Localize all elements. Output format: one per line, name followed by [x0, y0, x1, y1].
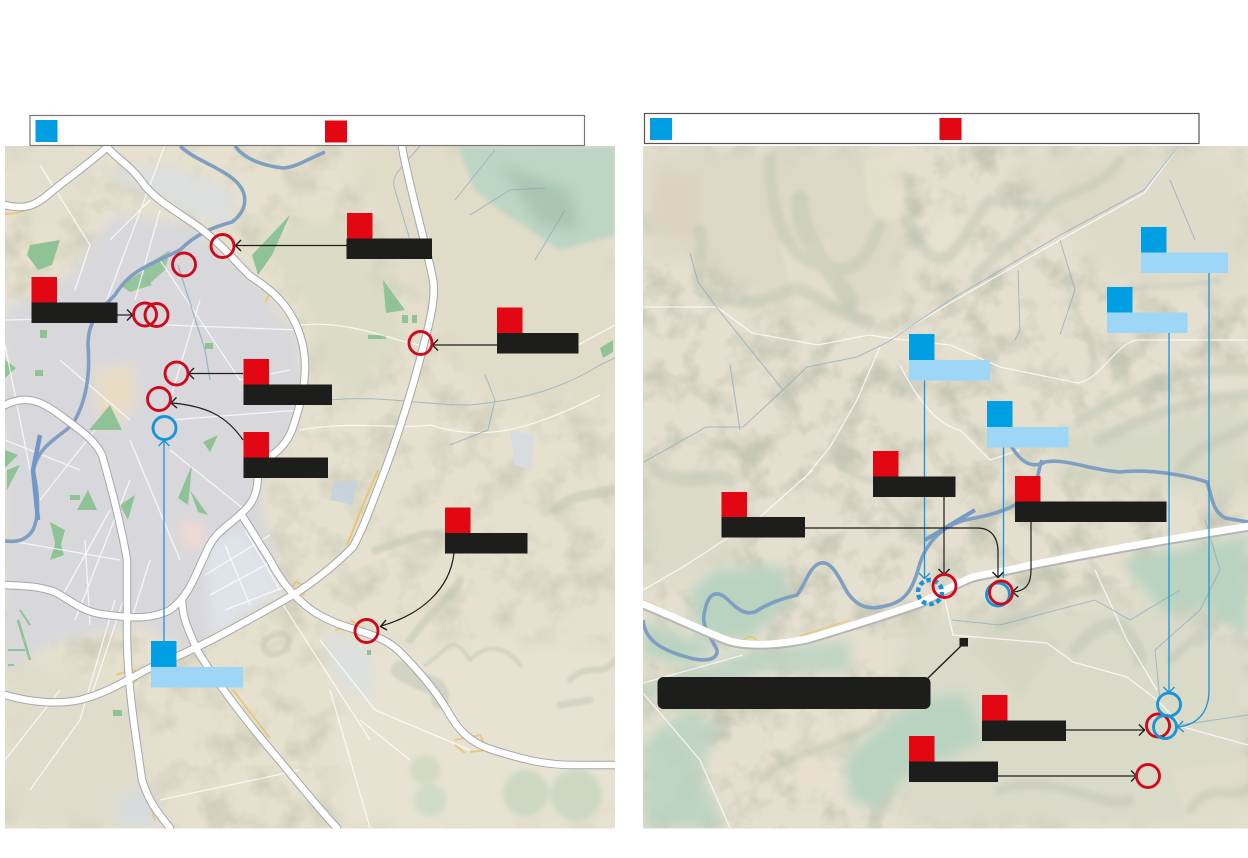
- label: red I: [909, 736, 998, 782]
- label: centre red: [244, 359, 332, 405]
- label: north-east red: [346, 213, 432, 259]
- label: south-east red: [445, 508, 528, 554]
- markers and callouts: left map: [32, 213, 578, 688]
- legend: right: [644, 114, 1199, 144]
- ramps: [5, 160, 487, 820]
- city area: [5, 215, 300, 670]
- arrow: blue line to blue circle: [158, 440, 170, 641]
- markers and callouts: right map: [658, 227, 1228, 788]
- river: [5, 146, 245, 541]
- label: south-centre red: [244, 432, 328, 478]
- black arrow G: [805, 528, 1004, 578]
- arrow: label to ring-road site: [235, 240, 347, 251]
- marker circles: [918, 574, 1180, 788]
- gullies: [655, 160, 1248, 810]
- arrow: label to centre site: [188, 368, 243, 379]
- label: south blue: [151, 641, 243, 688]
- blue line A with curved end: [1178, 273, 1209, 732]
- legend red swatch: [325, 120, 347, 142]
- black arrow I: [998, 770, 1136, 782]
- label: red G: [722, 492, 805, 538]
- legend: left: [30, 116, 584, 146]
- label: blue A: [1141, 227, 1228, 273]
- legend red swatch: [940, 118, 962, 140]
- blue line B: [1164, 333, 1174, 692]
- street grid: [5, 145, 615, 828]
- arrow: label to twin circles: [118, 310, 132, 320]
- label: blue D: [987, 401, 1068, 448]
- lane lines: [643, 147, 1248, 828]
- label: red F: [1015, 476, 1166, 522]
- forests: [640, 535, 1248, 828]
- label: west red: [32, 277, 118, 323]
- label: east red: [497, 308, 578, 354]
- arrow: curved to south-east site: [380, 553, 454, 630]
- blue line D: [1002, 447, 1004, 578]
- blue line C: [919, 380, 930, 578]
- label: blue B: [1107, 287, 1188, 333]
- parks: [5, 215, 613, 716]
- panel: left map: [5, 145, 615, 829]
- fields: [764, 169, 944, 772]
- panel: right map: [640, 146, 1248, 829]
- marker circles: [134, 234, 432, 642]
- label: red H: [982, 695, 1066, 741]
- arrow: curved to south-centre site: [171, 398, 243, 440]
- legend blue swatch: [36, 120, 58, 142]
- label: blue C: [909, 334, 990, 380]
- callout: rounded black note with leader: [658, 638, 968, 709]
- river: [643, 460, 1042, 660]
- black arrow E: [938, 497, 950, 574]
- black arrow H: [1066, 724, 1144, 736]
- forest: [458, 146, 615, 250]
- ramps: [643, 600, 850, 650]
- black arrow F: [1012, 522, 1031, 597]
- roads: [5, 147, 615, 828]
- motorway: [643, 527, 1248, 645]
- label: red E: [873, 451, 956, 497]
- arrow: label to east site: [432, 340, 497, 350]
- legend blue swatch: [650, 118, 672, 140]
